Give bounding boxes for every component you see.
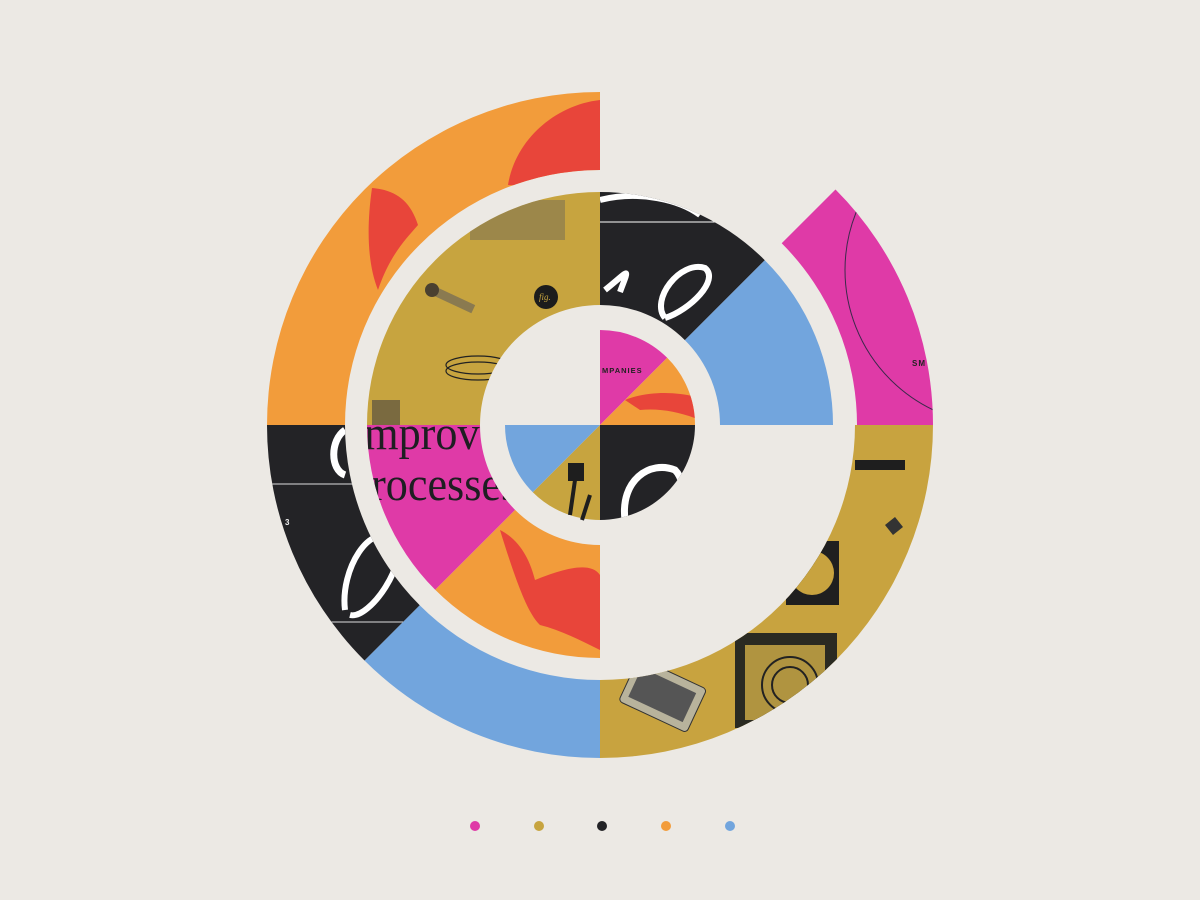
middle segment: pink with text: improve — [352, 406, 499, 459]
outer segment: pink — [782, 190, 933, 425]
outer segment: dark: 3 — [285, 518, 290, 527]
legend dots — [470, 821, 735, 831]
outer segment: gold with objects — [600, 425, 933, 758]
outer segment: pink: SM — [912, 359, 926, 368]
outer segment: orange — [267, 92, 600, 425]
middle segment: orange with red bird — [435, 510, 600, 658]
middle segment: blue — [685, 260, 833, 425]
inner pie — [505, 330, 700, 530]
inner slice: blue — [505, 425, 600, 492]
middle ring — [349, 192, 833, 658]
inner slice: pink: MPANIES — [602, 366, 643, 375]
outer ring — [267, 92, 933, 826]
middle segment: pink with text: processes — [349, 457, 518, 510]
inner slice: dark — [600, 425, 695, 530]
middle segment: gold with objects — [367, 192, 600, 425]
outer segment: dark — [267, 425, 420, 660]
outer segment: blue — [364, 605, 600, 758]
inner slice: gold — [533, 425, 600, 520]
middle segment: gold with objects: fig. — [539, 292, 551, 302]
inner slice: orange — [600, 358, 700, 425]
inner slice: pink — [600, 330, 667, 425]
middle segment: dark with script letter — [600, 192, 765, 340]
middle segment: pink with text — [367, 425, 515, 590]
